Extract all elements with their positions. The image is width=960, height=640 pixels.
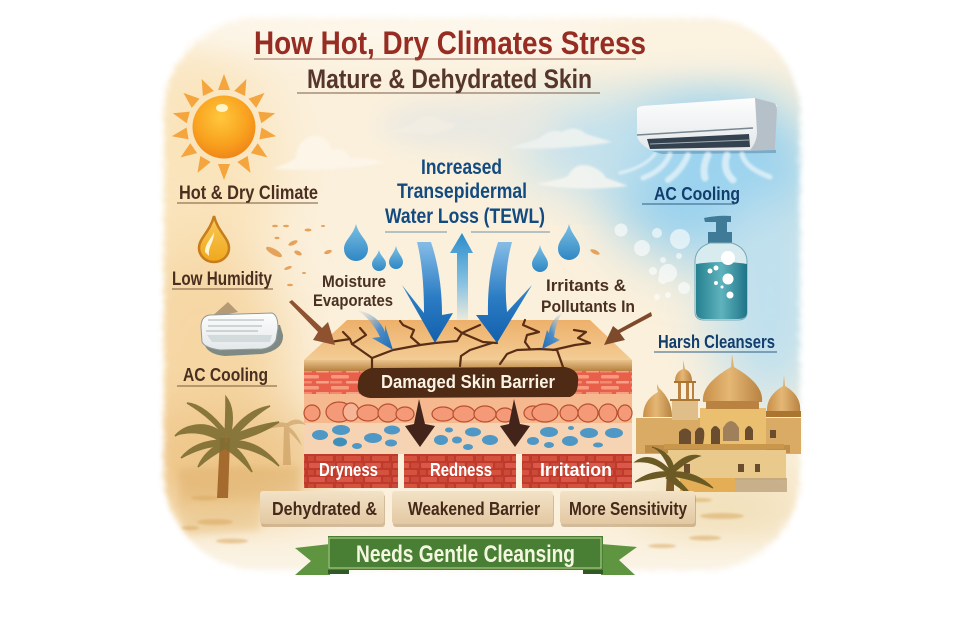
label: irritation: Irritation bbox=[540, 460, 612, 480]
heading: increased TEWL: Increased bbox=[421, 156, 502, 179]
icon: oil drop bbox=[199, 216, 229, 262]
subtitle: Mature & Dehydrated Skin bbox=[307, 64, 592, 94]
skin layer: cracked surface bbox=[304, 320, 632, 360]
label: damaged skin barrier: Damaged Skin Barrier bbox=[381, 372, 555, 392]
palace bbox=[636, 354, 801, 492]
skin layer: peach cells bbox=[304, 394, 632, 424]
skin cross-section bbox=[304, 320, 632, 488]
arrow: barrier down left bbox=[405, 399, 435, 447]
icon: air conditioner bbox=[637, 98, 777, 154]
arrow: up blue bbox=[450, 233, 473, 320]
title: How Hot, Dry Climates Stress bbox=[254, 25, 646, 61]
label: AC cooling left: AC Cooling bbox=[183, 365, 268, 385]
arrow: brown right bbox=[604, 312, 652, 345]
plaque: dehydrated: Dehydrated & bbox=[272, 499, 377, 519]
bubbles bbox=[614, 224, 690, 300]
plaque: more sensitivity bbox=[560, 491, 696, 527]
heading: increased TEWL: Transepidermal bbox=[397, 180, 527, 203]
icon: water drops right bbox=[532, 224, 580, 272]
icon: right palm bbox=[635, 447, 713, 498]
arrow: small blue right bbox=[542, 312, 563, 349]
banner: needs gentle cleansing: Needs Gentle Cleansing bbox=[356, 541, 575, 568]
plaque: dehydrated bbox=[260, 491, 385, 527]
icon: cleanser bottle bbox=[695, 216, 747, 320]
plaque: more sensitivity: More Sensitivity bbox=[569, 499, 687, 519]
desert foreground bbox=[176, 466, 744, 548]
skin layer: red epidermis bbox=[304, 371, 632, 395]
label: irritants and pollutants bbox=[541, 276, 635, 316]
label: irritants and pollutants: Pollutants In bbox=[541, 297, 635, 316]
palace: right dome bbox=[766, 375, 801, 417]
palace: main wall bbox=[636, 418, 801, 454]
label: redness: Redness bbox=[430, 460, 492, 480]
label: dryness: Dryness bbox=[319, 460, 378, 480]
palace: minaret bbox=[670, 360, 700, 420]
palace: arches bbox=[679, 421, 776, 473]
plaque: weakened barrier: Weakened Barrier bbox=[408, 499, 540, 519]
surface cracks bbox=[330, 320, 590, 369]
palace: main dome bbox=[703, 354, 762, 409]
arrow: small blue left bbox=[357, 310, 393, 350]
icon: water drops left bbox=[344, 224, 403, 271]
dry particles bbox=[265, 225, 600, 286]
background wash bbox=[159, 16, 804, 572]
label: harsh cleansers: Harsh Cleansers bbox=[658, 332, 775, 352]
icon: cold air streams bbox=[620, 154, 770, 180]
heading: increased TEWL bbox=[385, 156, 550, 232]
icon: white bar unit bbox=[201, 302, 283, 356]
arrow: barrier down right bbox=[500, 399, 530, 447]
arrow: big blue left bbox=[402, 242, 453, 343]
arrow: brown left bbox=[289, 300, 335, 345]
icon: background palm bbox=[260, 419, 306, 465]
icon: sun bbox=[171, 74, 277, 180]
skin layer: surface front band bbox=[304, 360, 632, 371]
damaged barrier bbox=[358, 367, 578, 398]
skin layer: red brick tiles bbox=[304, 454, 632, 488]
label: moisture evaporates bbox=[313, 272, 393, 310]
label: hot and dry climate: Hot & Dry Climate bbox=[179, 183, 318, 204]
plaque: weakened barrier bbox=[392, 491, 554, 527]
infographic bbox=[159, 16, 804, 575]
skin layer: moisture droplets bbox=[304, 423, 632, 454]
palace: left dome bbox=[643, 384, 672, 417]
label: irritants and pollutants: Irritants & bbox=[546, 276, 626, 295]
banner: needs gentle cleansing bbox=[295, 536, 637, 575]
label: moisture evaporates: Moisture bbox=[322, 272, 386, 291]
heading: increased TEWL: Water Loss (TEWL) bbox=[385, 205, 545, 228]
label: AC cooling right: AC Cooling bbox=[654, 184, 740, 204]
arrow: big blue right bbox=[476, 242, 532, 343]
label: moisture evaporates: Evaporates bbox=[313, 291, 393, 310]
icon: palm tree bbox=[175, 397, 279, 498]
clouds bbox=[274, 128, 627, 189]
label: low humidity: Low Humidity bbox=[172, 269, 272, 290]
